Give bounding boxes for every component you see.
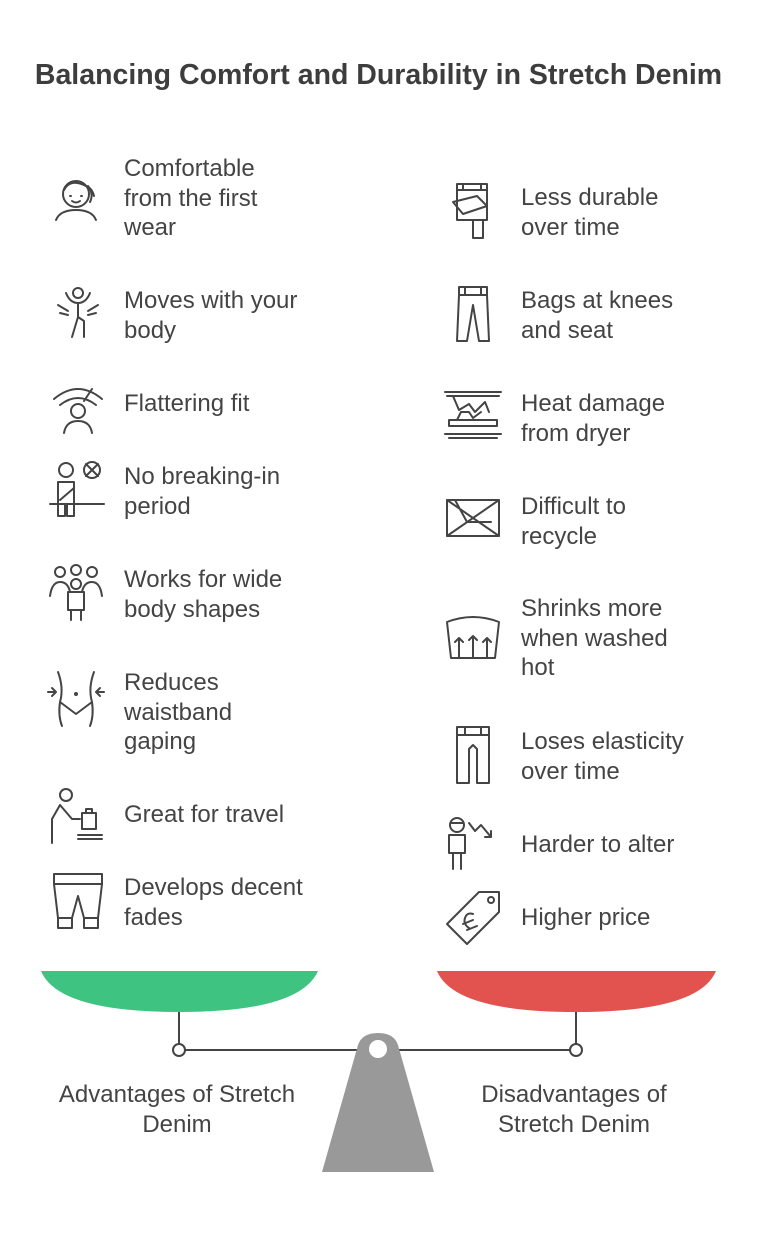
chart: balance scale xyxy=(41,971,716,1172)
icon: worn jeans xyxy=(452,183,488,239)
label: advantages: Advantages of Stretch xyxy=(59,1081,295,1108)
text: reduces: gaping xyxy=(124,728,196,755)
text: loses: over time xyxy=(521,758,620,784)
panel: advantages xyxy=(47,155,303,930)
text: shrinks xyxy=(521,595,668,681)
text: heat xyxy=(521,390,665,446)
text: loses xyxy=(521,728,684,784)
text: moves xyxy=(124,287,297,344)
text: moves: Moves with your xyxy=(124,287,297,314)
text: flattering: Flattering fit xyxy=(124,390,249,417)
text: less durable xyxy=(521,184,658,240)
icon: travel xyxy=(51,788,103,844)
label: advantages xyxy=(59,1081,295,1138)
text: harder: Harder to alter xyxy=(521,831,674,858)
text: difficult xyxy=(521,493,626,550)
text: comfortable: from the first xyxy=(124,184,257,212)
text: comfortable: Comfortable xyxy=(124,155,255,182)
icon: shrink xyxy=(446,616,500,659)
text: heat: Heat damage xyxy=(521,390,665,417)
text: develops: fades xyxy=(124,904,183,930)
text: bags: and seat xyxy=(521,316,613,344)
text: difficult: Difficult to xyxy=(521,493,626,520)
icon: woman face xyxy=(55,180,97,221)
text: comfortable: wear xyxy=(124,214,176,241)
icon: dryer xyxy=(444,391,502,439)
text: difficult: recycle xyxy=(521,522,597,550)
icon: shorts xyxy=(53,873,103,929)
text: reduces xyxy=(124,669,232,755)
text: bags: Bags at knees xyxy=(521,287,673,314)
title: Balancing Comfort and Durability in Stretch Denim xyxy=(35,59,722,91)
text: comfortable xyxy=(124,155,258,241)
text: no breaking-in xyxy=(124,463,280,520)
text: loses: Loses elasticity xyxy=(521,728,684,755)
text: higher price: Higher price xyxy=(521,904,650,931)
text: shrinks: Shrinks more xyxy=(521,595,662,622)
label: disadvantages: Stretch Denim xyxy=(498,1110,650,1138)
icon: moving body xyxy=(57,287,99,338)
text: develops: Develops decent xyxy=(124,874,303,901)
text: no breaking-in: period xyxy=(124,492,191,520)
label: advantages: Denim xyxy=(142,1110,212,1138)
icon: no breaking-in xyxy=(49,461,105,517)
label: disadvantages xyxy=(481,1081,667,1138)
text: reduces: Reduces xyxy=(124,669,219,696)
text: heat: from dryer xyxy=(521,420,630,446)
label: disadvantages: Disadvantages of xyxy=(481,1081,667,1108)
text: works xyxy=(124,566,282,622)
icon: waistband xyxy=(47,671,105,727)
red pan xyxy=(437,971,716,1012)
icon: recycle cross xyxy=(446,499,500,537)
icon: body shapes xyxy=(49,564,103,621)
text: shrinks: when washed xyxy=(521,624,668,652)
text: moves: body xyxy=(124,316,176,344)
text: great for travel: Great for travel xyxy=(124,801,284,828)
fulcrum xyxy=(322,1033,434,1172)
text: reduces: waistband xyxy=(124,698,232,726)
green pan xyxy=(41,971,318,1012)
icon: flattering xyxy=(53,388,103,434)
icon: alter xyxy=(448,817,492,870)
icon: jeans xyxy=(456,726,490,784)
text: less durable: over time xyxy=(521,214,620,240)
icon: baggy pants xyxy=(456,286,490,342)
text: less durable: Less durable xyxy=(521,184,658,211)
panel: disadvantages xyxy=(444,183,684,945)
text: no breaking-in: No breaking-in xyxy=(124,463,280,490)
text: shrinks: hot xyxy=(521,654,554,681)
icon: price tag xyxy=(446,891,500,945)
text: develops xyxy=(124,874,303,930)
text: bags xyxy=(521,287,673,344)
text: works: body shapes xyxy=(124,596,260,622)
text: works: Works for wide xyxy=(124,566,282,593)
